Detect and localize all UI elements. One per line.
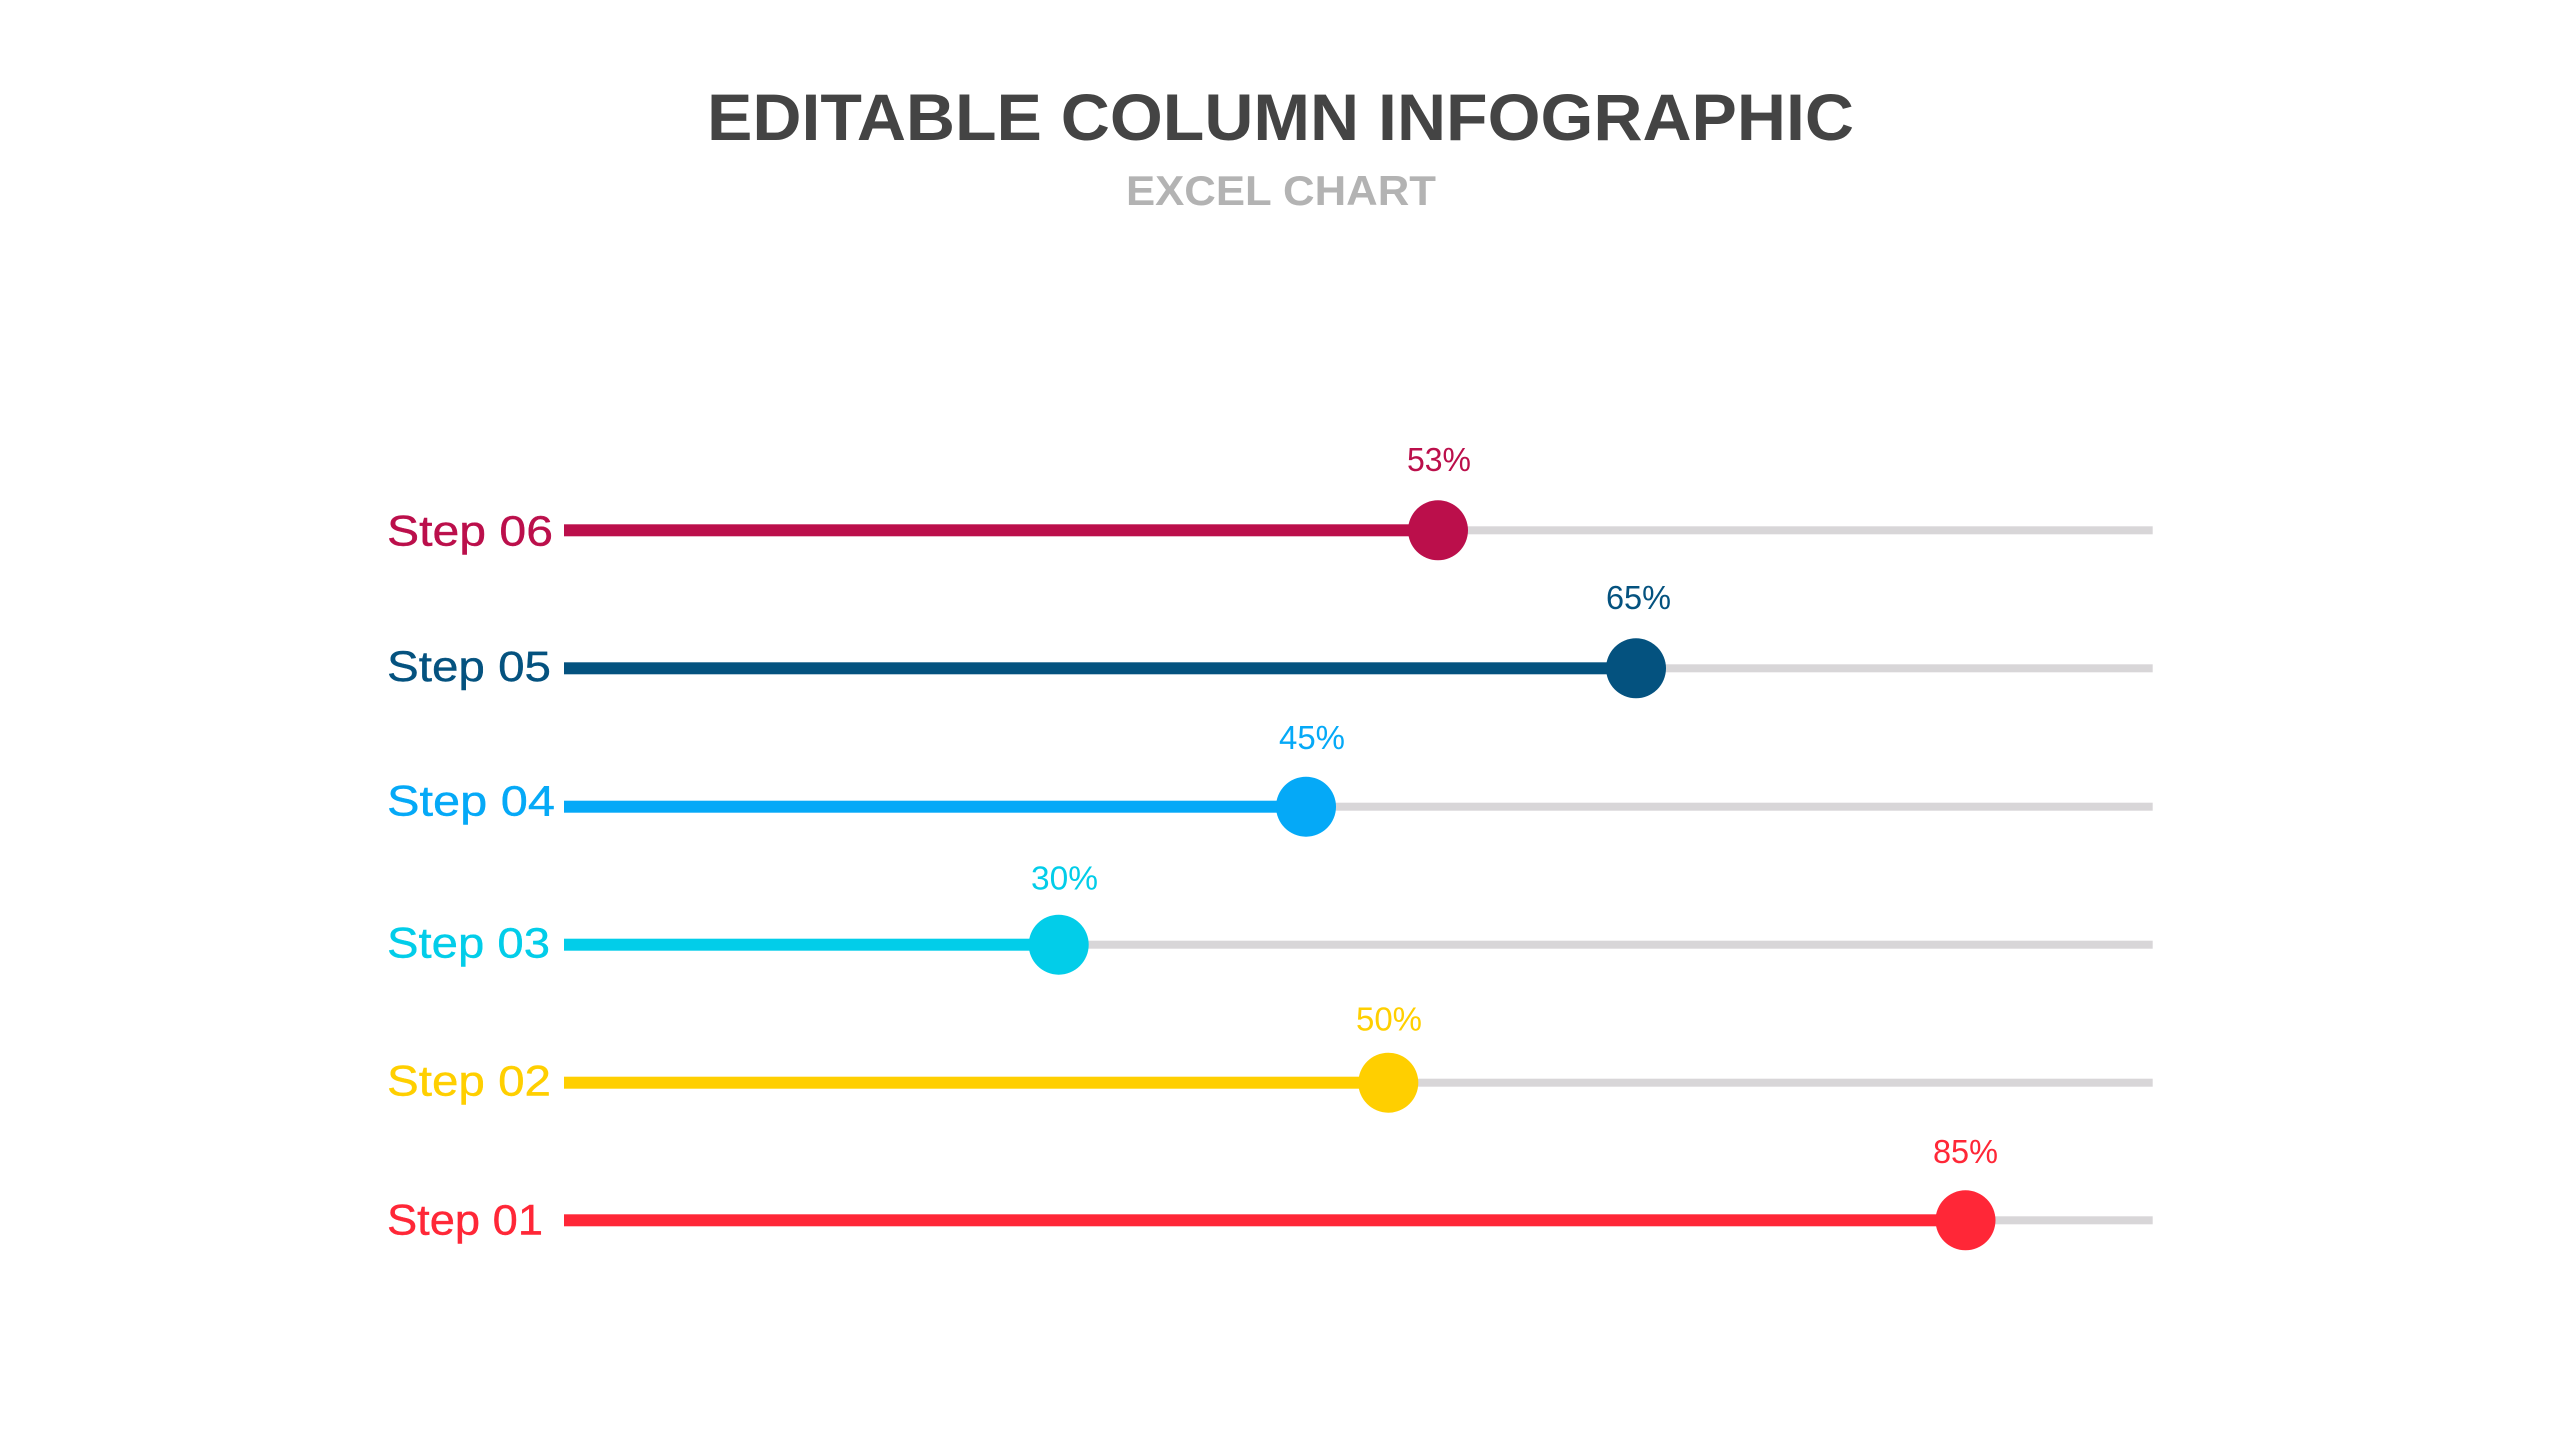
track: Step 02 — [564, 1079, 2153, 1087]
label: Step 04: Step 04 — [387, 778, 555, 826]
row: Step 03 — [387, 859, 2153, 975]
row: Step 05 — [387, 579, 2153, 698]
track: Step 01 — [564, 1216, 2153, 1224]
track: Step 03 — [564, 941, 2153, 949]
row: Step 04 — [387, 719, 2153, 837]
marker: Step 06 — [1408, 500, 1468, 560]
track: Step 05 — [564, 664, 2153, 672]
track: Step 04 — [564, 803, 2153, 811]
bar: Step 02 — [564, 1077, 1388, 1089]
label: Step 02: Step 02 — [387, 1058, 551, 1106]
label: Step 01: Step 01 — [387, 1196, 543, 1244]
title: EDITABLE COLUMN INFOGRAPHIC — [707, 80, 1854, 154]
marker: Step 02 — [1358, 1053, 1418, 1113]
bar: Step 06 — [564, 524, 1438, 536]
bar: Step 03 — [564, 939, 1059, 951]
label: Step 05: Step 05 — [387, 643, 551, 691]
row: Step 06 — [387, 441, 2153, 560]
value: 53%: 53% — [1407, 441, 1471, 478]
value: 45%: 45% — [1279, 719, 1345, 756]
label: Step 06: Step 06 — [387, 508, 553, 556]
label: Step 03: Step 03 — [387, 920, 550, 968]
value: 85%: 85% — [1933, 1133, 1998, 1170]
value: 65%: 65% — [1606, 579, 1671, 616]
marker: Step 04 — [1276, 777, 1336, 837]
bar: Step 04 — [564, 801, 1306, 813]
bar: Step 05 — [564, 662, 1636, 674]
marker: Step 05 — [1606, 638, 1666, 698]
row: Step 01 — [387, 1133, 2153, 1250]
value: 50%: 50% — [1356, 1001, 1422, 1038]
marker: Step 01 — [1936, 1190, 1996, 1250]
subtitle: EXCEL CHART — [1126, 167, 1436, 214]
row: Step 02 — [387, 1001, 2153, 1113]
track: Step 06 — [564, 526, 2153, 534]
marker: Step 03 — [1029, 915, 1089, 975]
bar: Step 01 — [564, 1214, 1965, 1226]
value: 30%: 30% — [1031, 859, 1098, 896]
